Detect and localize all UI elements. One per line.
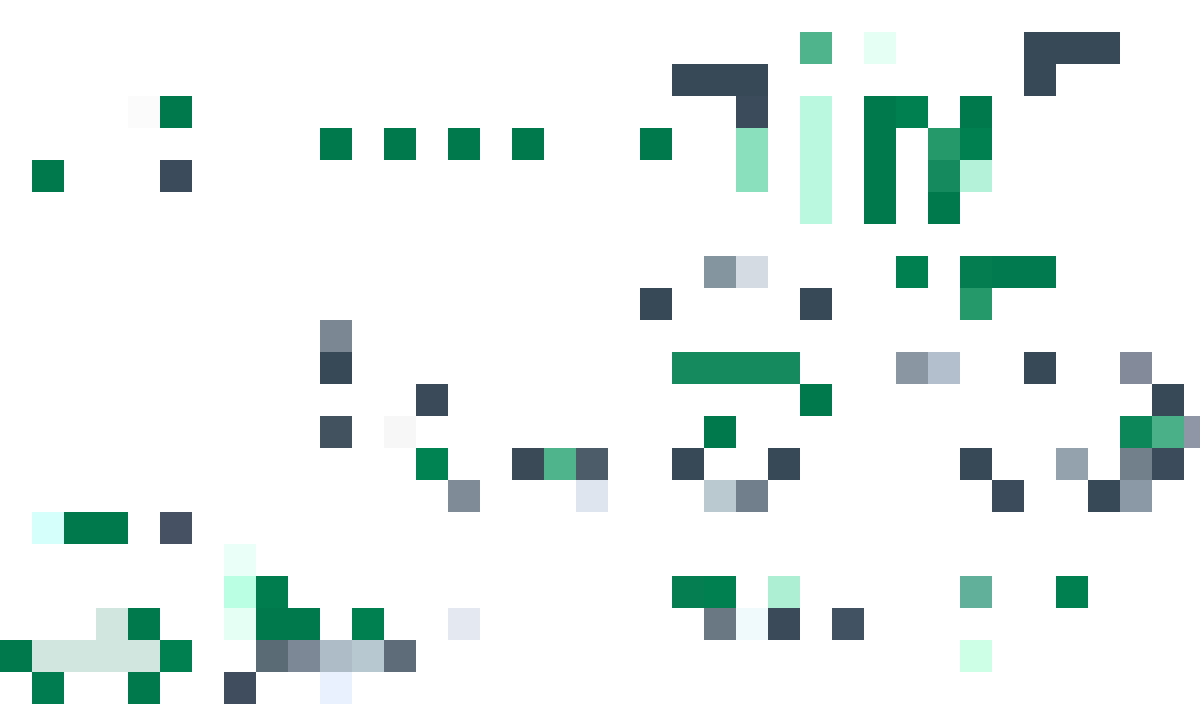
panel: lower left tiles (0, 512, 192, 704)
panel: upper right tiles (672, 32, 1120, 224)
panel: lower right tiles (672, 576, 1088, 672)
panel: lower centre left tiles (224, 544, 480, 704)
panel: right tiles (896, 256, 1200, 512)
panel: dotted green row (320, 128, 672, 160)
panel: centre left tiles (320, 320, 608, 512)
panel: centre tiles (640, 256, 832, 512)
panel: upper left tiles (32, 96, 192, 192)
